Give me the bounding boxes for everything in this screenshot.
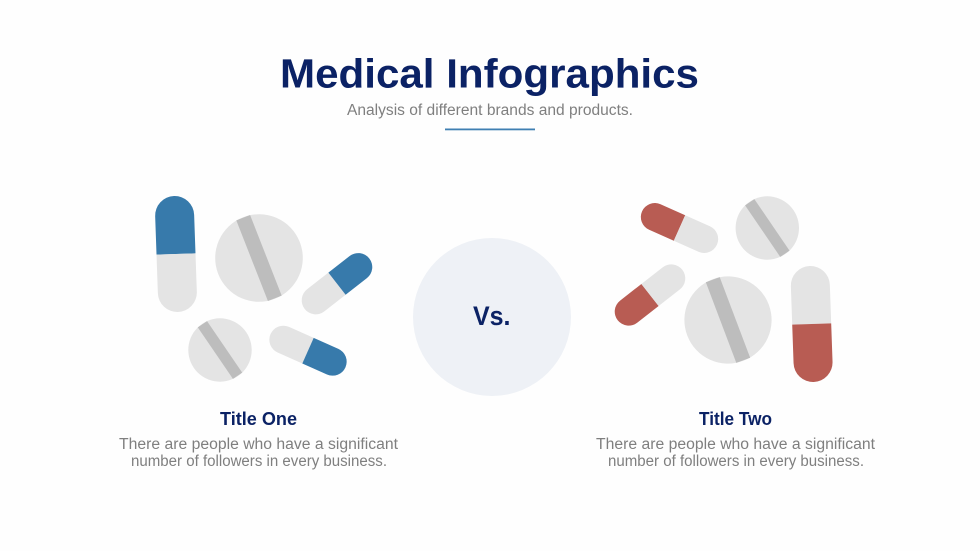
icon: vertical red capsule bbox=[790, 265, 833, 383]
badge label: Vs. bbox=[473, 301, 510, 331]
icon: large round tablet bbox=[202, 201, 316, 315]
icon: upper diagonal red capsule bbox=[636, 199, 723, 257]
panel: red pills illustration bbox=[609, 184, 833, 383]
panel: blue pills illustration bbox=[154, 195, 378, 394]
icon: vertical blue capsule bbox=[154, 195, 198, 313]
accent underline bbox=[445, 128, 535, 130]
text block: title two bbox=[596, 409, 876, 470]
title: Medical Infographics bbox=[280, 50, 699, 96]
icon: small round tablet bbox=[723, 184, 811, 272]
header bbox=[280, 50, 699, 130]
description: There are people who have a significant bbox=[596, 436, 876, 453]
versus badge bbox=[413, 238, 571, 396]
icon: large round tablet bbox=[672, 264, 784, 376]
heading: Title One bbox=[220, 409, 297, 429]
icon: lower diagonal blue capsule bbox=[265, 321, 351, 380]
icon: upper diagonal blue capsule bbox=[296, 247, 378, 320]
description: There are people who have a significant bbox=[119, 436, 399, 453]
text block: title one bbox=[119, 409, 399, 470]
description: number of followers in every business. bbox=[608, 453, 864, 470]
icon: small round tablet bbox=[176, 306, 264, 394]
description: number of followers in every business. bbox=[131, 453, 387, 470]
icon: lower diagonal red capsule bbox=[609, 259, 691, 331]
subtitle: Analysis of different brands and products. bbox=[347, 102, 633, 119]
heading: Title Two bbox=[699, 409, 772, 429]
badge circle bbox=[413, 238, 571, 396]
